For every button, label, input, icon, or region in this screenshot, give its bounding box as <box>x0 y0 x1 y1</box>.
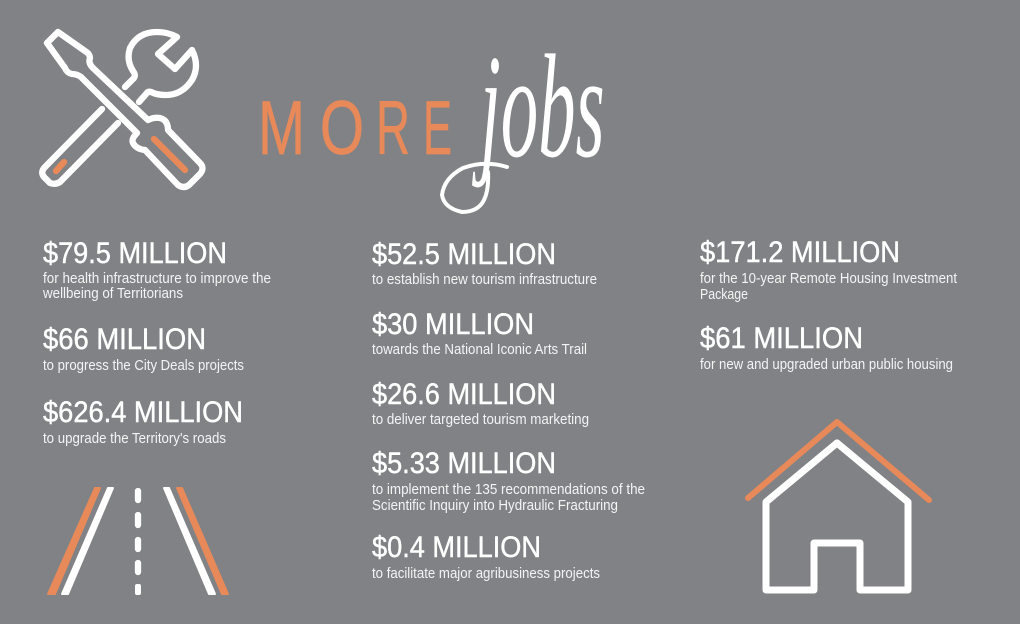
title word: MORE: E <box>423 86 452 171</box>
item: tourism infrastructure: $52.5 MILLION <box>372 238 556 271</box>
column 3 funding items <box>700 236 957 373</box>
item: tourism infrastructure <box>372 238 597 288</box>
title word: jobs <box>442 26 605 212</box>
item: Arts Trail: $30 MILLION <box>372 308 534 341</box>
item: health infrastructure: for health infrastructure to improve the <box>43 271 271 287</box>
item: Hydraulic Fracturing inquiry: $5.33 MILLION <box>372 447 556 480</box>
item: agribusiness: to facilitate major agribusiness projects <box>372 566 600 582</box>
icon: crossed screwdriver and wrench <box>42 32 202 187</box>
title word: MORE: O <box>320 86 364 171</box>
item: agribusiness <box>372 531 600 582</box>
item: urban public housing: for new and upgraded urban public housing <box>700 357 953 373</box>
title word: MORE <box>258 86 452 171</box>
item: Hydraulic Fracturing inquiry: Scientific Inquiry into Hydraulic Fracturing <box>372 498 618 514</box>
title <box>258 26 605 212</box>
column 1 funding items <box>42 237 271 447</box>
item: City Deals: $66 MILLION <box>43 323 206 356</box>
item: tourism infrastructure: to establish new tourism infrastructure <box>372 272 597 288</box>
item: tourism marketing: $26.6 MILLION <box>372 378 556 411</box>
item: roads: to upgrade the Territory's roads <box>43 431 226 447</box>
item: agribusiness: $0.4 MILLION <box>372 531 541 564</box>
item: tourism marketing <box>372 378 589 428</box>
title word: MORE: R <box>376 86 410 171</box>
title word: MORE: M <box>258 86 305 171</box>
item: Arts Trail <box>372 308 587 358</box>
item: Remote Housing <box>700 236 957 303</box>
item: Remote Housing: $171.2 MILLION <box>700 236 900 269</box>
item: health infrastructure <box>42 237 271 302</box>
item: Hydraulic Fracturing inquiry <box>372 447 645 514</box>
column 2 funding items <box>372 238 645 582</box>
item: City Deals: to progress the City Deals projects <box>43 358 244 374</box>
item: urban public housing: $61 MILLION <box>700 322 863 355</box>
item: Arts Trail: towards the National Iconic Arts Trail <box>372 342 587 358</box>
item: roads <box>43 396 243 447</box>
icon: house <box>748 422 929 590</box>
item: urban public housing <box>700 322 953 373</box>
item: Remote Housing: Package <box>700 287 748 303</box>
item: roads: $626.4 MILLION <box>43 396 243 429</box>
title word: jobs: jobs <box>472 26 605 189</box>
item: Hydraulic Fracturing inquiry: to implement the 135 recommendations of the <box>372 482 645 498</box>
item: health infrastructure: wellbeing of Territorians <box>42 286 183 302</box>
item: tourism marketing: to deliver targeted tourism marketing <box>372 412 589 428</box>
item: City Deals <box>43 323 244 374</box>
item: health infrastructure: $79.5 MILLION <box>43 237 227 270</box>
icon: road <box>48 488 228 595</box>
item: Remote Housing: for the 10-year Remote Housing Investment <box>700 271 957 287</box>
